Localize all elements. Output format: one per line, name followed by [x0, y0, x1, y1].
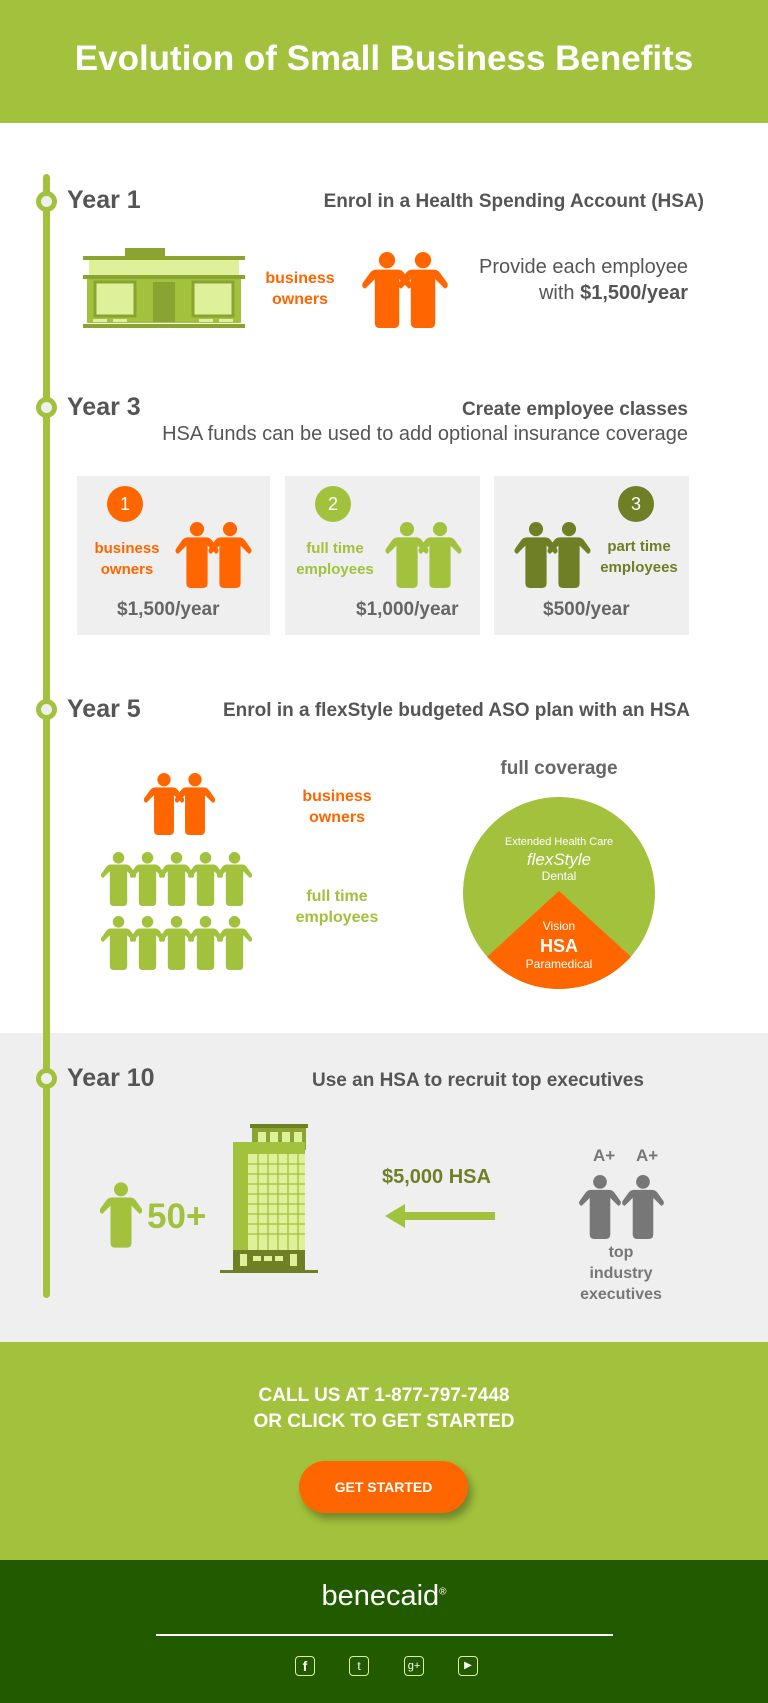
text: business owners: business [265, 270, 335, 287]
text: business owners: owners [309, 809, 365, 826]
icon: youtube: ▶ [464, 1660, 472, 1671]
CTA text [253, 1385, 515, 1432]
label: owners [101, 561, 153, 578]
icon: facebook [295, 1656, 315, 1676]
amount: $1,500/year [117, 599, 220, 620]
icon: executives [579, 1146, 664, 1303]
amount: $500/year [543, 599, 630, 620]
badge 1: 1 [120, 494, 130, 514]
text: business owners: business [302, 788, 372, 805]
icon: business owners pair [362, 252, 448, 328]
icon: office building [220, 1124, 318, 1273]
divider line [156, 1634, 613, 1636]
Year 3 heading: Create employee classes [462, 399, 688, 420]
timeline node year 3 [36, 397, 57, 418]
text: provide each employee [479, 256, 688, 304]
badge 3: 3 [631, 494, 641, 514]
label: employees [600, 559, 678, 576]
text: full coverage: full coverage [500, 758, 618, 779]
arrow [385, 1204, 495, 1228]
chart: coverage circle: Paramedical [526, 957, 592, 971]
text: provide each employee: Provide each employee [479, 256, 688, 278]
label [94, 540, 160, 578]
amount: $1,000/year [356, 599, 458, 620]
title: Evolution of Small Business Benefits [75, 39, 693, 78]
label: full time [306, 540, 364, 557]
text: top industry executives: top [609, 1244, 633, 1261]
text: 50+: 50+ [147, 1197, 206, 1236]
panel: class 1 business owners [77, 476, 270, 635]
icon: executives: A+ [636, 1146, 658, 1165]
icon pair [386, 522, 462, 588]
chart: coverage circle [463, 797, 655, 989]
text: top industry executives: executives [580, 1286, 662, 1303]
icon: facebook: f [303, 1658, 307, 1674]
text: full time employees: employees [296, 909, 378, 926]
icon pair [176, 522, 252, 588]
text: top industry executives [580, 1244, 662, 1303]
badge 3 [618, 486, 654, 522]
chart: coverage circle: HSA [540, 936, 578, 956]
text: provide each employee: with $1,500/year [539, 282, 688, 304]
label [600, 538, 678, 576]
social icons [295, 1656, 478, 1676]
icon: twitter: t [357, 1659, 361, 1673]
Year 5 label: Year 5 [67, 695, 141, 723]
timeline node year 10 [36, 1068, 57, 1089]
icon: owners pair [144, 773, 215, 835]
A+ labels: A+ [593, 1146, 615, 1165]
label: business [94, 540, 160, 557]
Year 3 label: Year 3 [67, 393, 141, 421]
icon: person 50+ [100, 1182, 142, 1248]
button: get started: GET STARTED [335, 1479, 432, 1495]
chart: coverage circle: Vision [543, 919, 575, 933]
CTA text: CALL US AT 1-877-797-7448 [258, 1385, 509, 1406]
text: top industry executives: industry [589, 1265, 653, 1282]
CTA band [0, 1342, 768, 1560]
timeline node year 5 [36, 699, 57, 720]
badge 2: 2 [328, 494, 338, 514]
timeline line [43, 174, 50, 1298]
panel: class 3 part time [494, 476, 689, 635]
grey band year 10 [0, 1033, 768, 1342]
panel: class 2 full time [285, 476, 480, 635]
chart: coverage circle: flexStyle [527, 850, 591, 869]
Year 5 heading: Enrol in a flexStyle budgeted ASO plan with an HSA [223, 700, 690, 721]
footer [0, 1560, 768, 1703]
badge 2 [315, 486, 351, 522]
text: full time employees [296, 888, 378, 926]
text: business owners [302, 788, 372, 826]
badge 1 [107, 486, 143, 522]
grey people [579, 1175, 664, 1239]
text: full time employees: full time [306, 888, 368, 905]
Year 1 heading: Enrol in a Health Spending Account (HSA) [324, 191, 704, 212]
icon: employees grid [101, 852, 252, 970]
icon pair [514, 522, 590, 588]
text: business owners: owners [272, 291, 328, 308]
Year 1 label: Year 1 [67, 186, 141, 214]
button: get started [299, 1461, 468, 1513]
header bar [0, 0, 768, 123]
timeline node year 1 [36, 191, 57, 212]
icon: google plus [404, 1656, 424, 1676]
icon: twitter [349, 1656, 369, 1676]
text: business owners [265, 270, 335, 308]
icon: store [83, 248, 245, 328]
chart: coverage circle: Extended Health Care [505, 836, 613, 848]
text: $5,000 HSA: $5,000 HSA [382, 1166, 491, 1188]
Year 10 heading: Use an HSA to recruit top executives [312, 1070, 644, 1091]
icon: youtube [458, 1656, 478, 1676]
Year 3 subheading: HSA funds can be used to add optional insurance coverage [162, 423, 688, 445]
logo: benecaid: benecaid® [321, 1580, 447, 1612]
label: employees [296, 561, 374, 578]
label [296, 540, 374, 578]
icon: google plus: g+ [408, 1660, 420, 1672]
CTA text: OR CLICK TO GET STARTED [253, 1411, 515, 1432]
chart: coverage circle: Dental [542, 869, 576, 883]
Year 10 label: Year 10 [67, 1064, 155, 1092]
label: part time [607, 538, 671, 555]
